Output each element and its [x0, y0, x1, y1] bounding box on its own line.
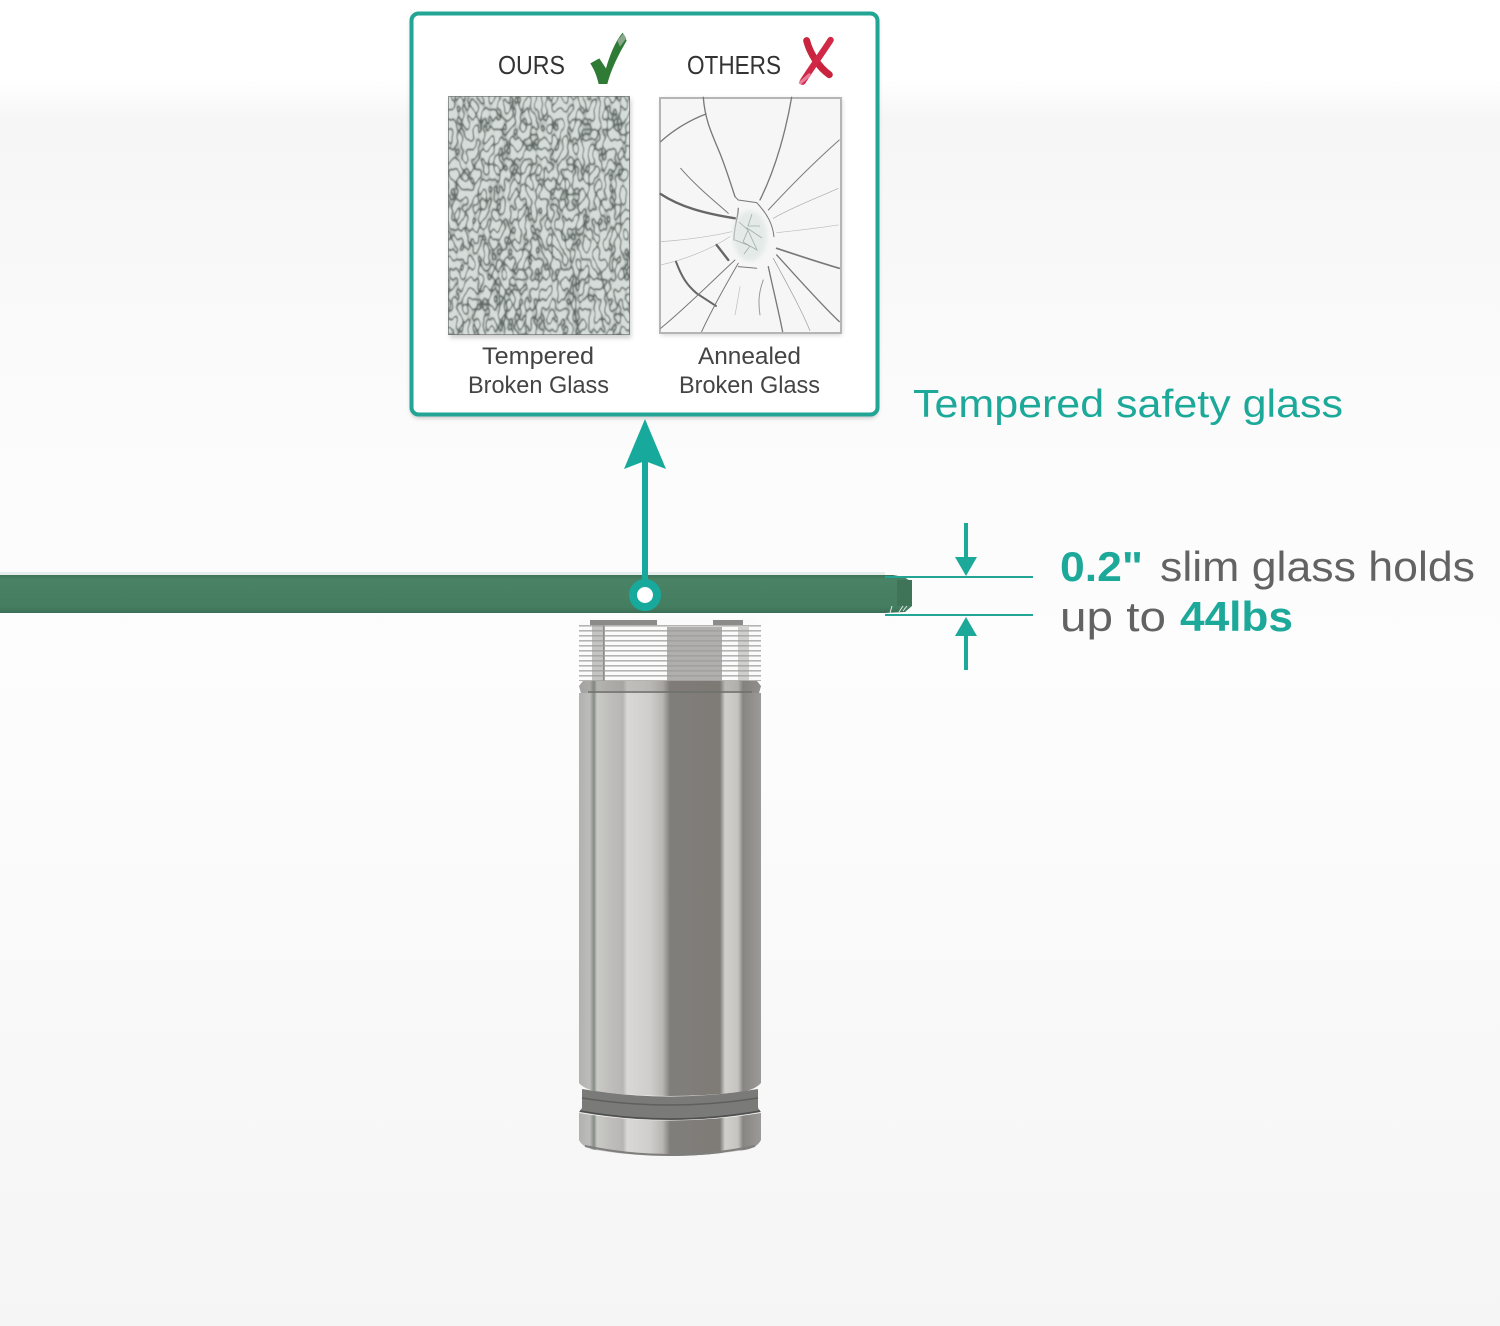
icon: red cross [801, 40, 831, 83]
arrow: up [955, 617, 977, 670]
panel: glass comparison [411, 14, 878, 418]
metal standoff cylinder [579, 618, 761, 1156]
arrow: callout from glass to panel [624, 419, 666, 607]
caption: tempered: Tempered [482, 343, 594, 370]
icon: green check mark [590, 33, 627, 84]
rubber gasket [579, 1089, 761, 1120]
annealed glass photo [660, 97, 842, 335]
text: thickness and load capacity [1060, 543, 1475, 640]
caption: annealed: Broken Glass [679, 372, 820, 399]
arrow: down [955, 523, 977, 576]
glass shelf edge [0, 572, 912, 613]
text: thickness and load capacity: 44lbs [1180, 593, 1293, 640]
label: others: OTHERS [687, 50, 781, 80]
text: thickness and load capacity: slim glass holds [1160, 543, 1475, 590]
tempered glass photo [448, 96, 631, 338]
caption: annealed: Annealed [698, 343, 801, 370]
cylinder body [579, 693, 761, 1096]
threaded top [579, 618, 761, 682]
caption: annealed [679, 343, 820, 399]
thickness dimension markers [885, 523, 1033, 670]
caption: tempered [468, 343, 609, 399]
collar [579, 681, 761, 693]
panel frame [411, 14, 878, 418]
heading: tempered safety glass: Tempered safety glass [913, 383, 1343, 426]
caption: tempered: Broken Glass [468, 372, 609, 399]
label: ours: OURS [498, 50, 565, 80]
text: thickness and load capacity: up to [1060, 593, 1166, 640]
cylinder foot [579, 1113, 761, 1156]
text: thickness and load capacity: 0.2" [1060, 543, 1143, 590]
